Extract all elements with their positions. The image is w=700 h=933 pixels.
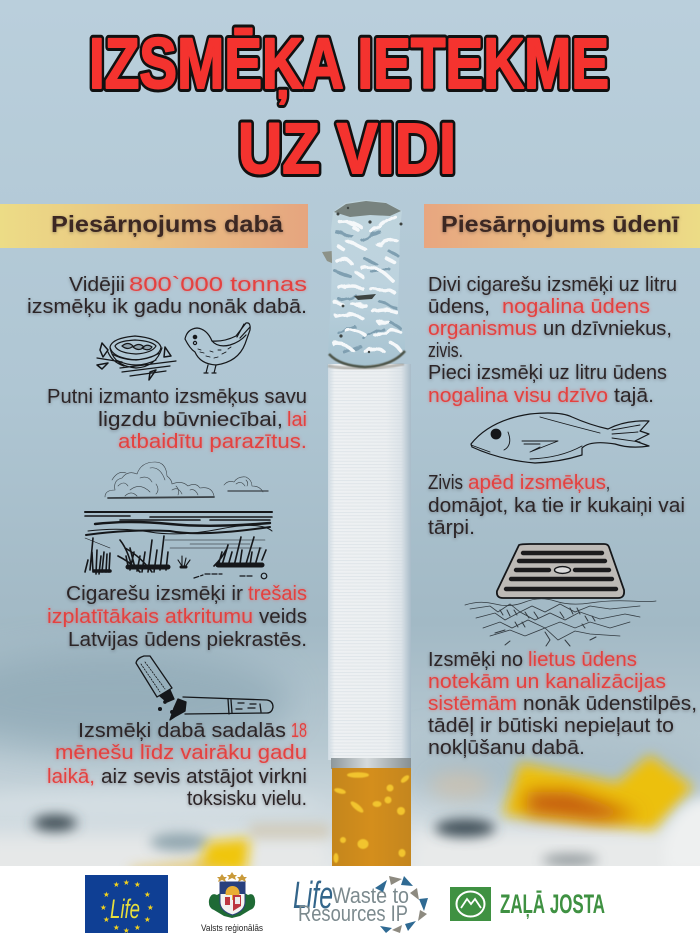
heading bar: right: [424, 204, 700, 248]
text: fish eat butts: ,: [606, 471, 610, 494]
text: third most common litter: izplatītākais atkritumu: [47, 605, 253, 628]
logo: Life Waste to Resources IP: Waste to: [332, 883, 409, 908]
icon: nest: [97, 336, 176, 380]
cigarette band: [331, 758, 411, 769]
logo: Zaļā josta: ZAĻĀ JOSTA: [500, 889, 605, 919]
logo: EU Life: ★: [100, 903, 107, 912]
icon: sea and grass: [85, 512, 272, 579]
text: drains carry butts into waterways: Izsmēķi no: [428, 648, 523, 671]
logo: EU Life: ★: [144, 890, 151, 899]
text: drains carry butts into waterways: nonāk ūdenstilpēs,: [523, 692, 697, 715]
text: birds use butts: [47, 385, 307, 453]
text: fish eat butts: [428, 471, 685, 539]
text: butts in water kill organisms: Divi cigarešu izsmēķi uz litru: [428, 273, 677, 296]
logo: EU Life: ★: [144, 915, 151, 924]
text: butts in water kill organisms: organismus: [428, 317, 537, 340]
icon: water waves: [465, 599, 656, 646]
text: birds use butts: lai: [287, 408, 307, 431]
text: 800 000 tonnes: izsmēķu ik gadu nonāk dabā.: [27, 295, 307, 318]
text: third most common litter: [47, 582, 307, 651]
text: decomposition time: mēnešu līdz vairāku gadu: [55, 741, 307, 764]
icon: fish: [471, 413, 649, 463]
title: UZ VIDI: [238, 110, 456, 189]
text: decomposition time: 18: [291, 719, 307, 742]
cigarette paper: [328, 364, 411, 760]
text: third most common litter: Cigarešu izsmēķi ir: [66, 582, 243, 605]
logo: EU Life: [85, 875, 168, 933]
logo: Latvia coat of arms: [209, 872, 255, 918]
text: fish eat butts: domājot, ka tie ir kukaiņi vai: [428, 494, 685, 517]
text: drains carry butts into waterways: tādēļ ir būtiski nepieļaut to: [428, 714, 674, 737]
text: birds use butts: atbaidītu parazītus.: [118, 430, 307, 453]
icon: clouds: [105, 462, 268, 498]
logo: EU Life: Life: [110, 894, 140, 924]
text: 800 000 tonnes: Vidējii: [69, 273, 125, 296]
footer logo strip: [0, 866, 700, 933]
text: 800 000 tonnes: 800`000 tonnas: [129, 273, 307, 296]
cigarette filter: [332, 768, 411, 866]
text: butts in water kill organisms: [428, 273, 677, 407]
text: third most common litter: trešais: [248, 582, 307, 605]
heading bar: right: Piesārņojums ūdenī: [441, 211, 680, 237]
text: drains carry butts into waterways: notekām un kanalizācijas: [428, 670, 666, 693]
heading bar: left: [0, 204, 308, 248]
logo: EU Life: ★: [113, 923, 120, 932]
text: decomposition time: toksisku vielu.: [187, 787, 307, 810]
text: birds use butts: ligzdu būvniecībai,: [98, 408, 283, 431]
text: decomposition time: laikā,: [47, 765, 95, 788]
text: fish eat butts: Zivis: [428, 471, 463, 494]
text: butts in water kill organisms: nogalina visu dzīvo: [428, 384, 608, 407]
text: butts in water kill organisms: Pieci izsmēķi uz litru ūdens: [428, 361, 667, 384]
text: drains carry butts into waterways: sistēmām: [428, 692, 517, 715]
text: drains carry butts into waterways: nokļūšanu dabā.: [428, 736, 585, 759]
text: 800 000 tonnes: [27, 273, 307, 318]
logo: Zaļā josta: [450, 887, 605, 921]
title: [89, 25, 609, 189]
title: UZ VIDI: [238, 110, 456, 189]
cigarette ash: [322, 200, 405, 367]
text: drains carry butts into waterways: [428, 648, 697, 759]
logo: EU Life: ★: [103, 915, 110, 924]
logo: Life Waste to Resources IP: Resources IP: [298, 901, 408, 926]
cigarette: [322, 200, 411, 866]
text: decomposition time: [47, 719, 307, 810]
logo: EU Life: ★: [147, 903, 154, 912]
text: butts in water kill organisms: ūdens,: [428, 295, 490, 318]
text: birds use butts: Putni izmanto izsmēķus savu: [47, 385, 307, 408]
text: butts in water kill organisms: tajā.: [614, 384, 654, 407]
logo: EU Life: ★: [103, 890, 110, 899]
text: drains carry butts into waterways: lietus ūdens: [528, 648, 637, 671]
icon: storm drain: [497, 544, 624, 598]
text: decomposition time: aiz sevis atstājot virkni: [101, 765, 307, 788]
logo: EU Life: ★: [134, 880, 141, 889]
logo: Life Waste to Resources IP: [293, 875, 428, 933]
logo: EU Life: ★: [113, 880, 120, 889]
heading bar: left: Piesārņojums dabā: [51, 211, 283, 237]
text: butts in water kill organisms: zivis.: [428, 339, 463, 362]
text: butts in water kill organisms: un dzīvniekus,: [543, 317, 672, 340]
logo: Life Waste to Resources IP: Life: [293, 875, 333, 917]
text: butts in water kill organisms: nogalina ūdens: [502, 295, 650, 318]
text: fish eat butts: apēd izsmēķus: [468, 471, 606, 494]
icon: bird: [185, 323, 250, 373]
logo: EU Life: ★: [123, 878, 130, 887]
logo: EU Life: ★: [134, 923, 141, 932]
icon: broken cigarette: [136, 656, 273, 720]
text: decomposition time: Izsmēķi dabā sadalās: [78, 719, 286, 742]
text: third most common litter: Latvijas ūdens piekrastēs.: [68, 628, 307, 651]
text: fish eat butts: tārpi.: [428, 516, 475, 539]
text: third most common litter: veids: [259, 605, 307, 628]
